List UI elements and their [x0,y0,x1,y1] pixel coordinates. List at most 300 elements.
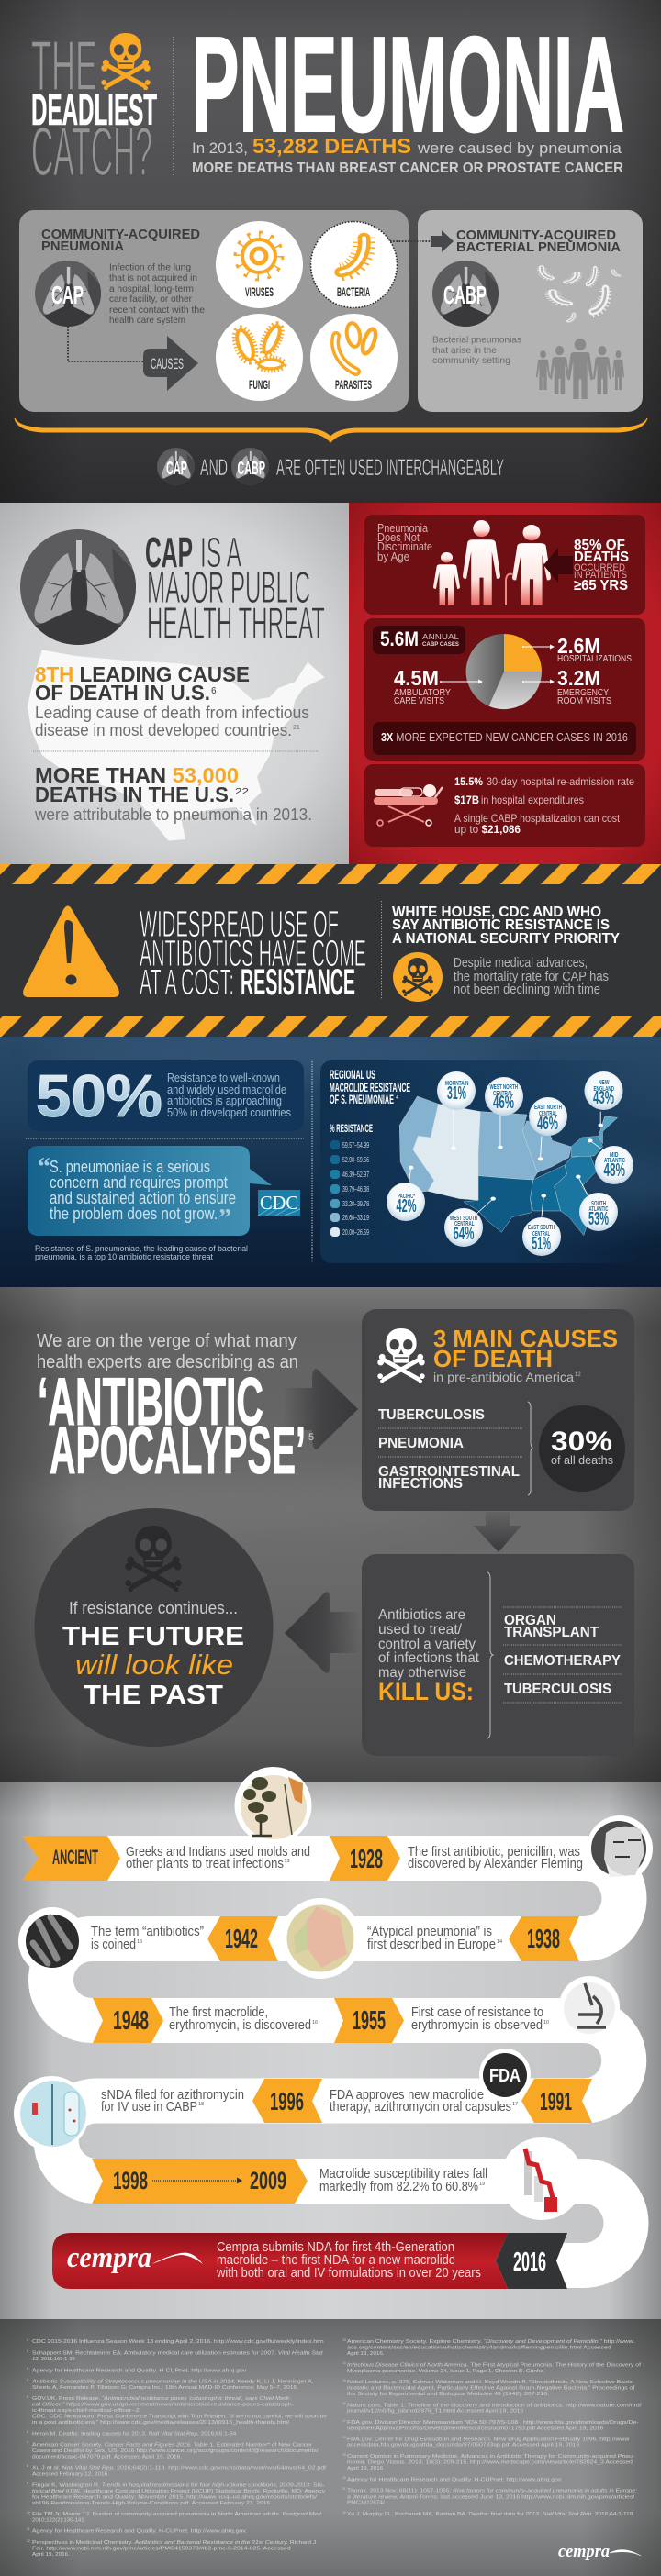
timeline: 1991: FDA approves new macrolide [330,2088,484,2103]
text: CAP definition: a hospital, long-term [109,283,194,294]
bubble: mid atlantic 48% [595,1146,633,1184]
text: mortality not declining [454,956,609,997]
timeline: 1998 to 2009 [92,2137,583,2220]
panel: annual CABP cases [364,618,645,761]
text: top 10 threat: Resistance of S. pneumoniae, the leading cause of bacterial [35,1244,248,1254]
panel: 50 percent resistance: 50% in developed countries [167,1105,291,1119]
stat: more than 53,000 deaths: were attributable to pneumonia in 2013. [34,805,312,824]
text: references left column: CDC 2015-2016 Influenza Season Week 13 ending April 2, 2016. http://www.cdc.gov/flu/weekly/index.htm [32,2339,324,2345]
panel: kill us: KILL US: [378,1678,474,1705]
stat: 3.2M emergency room visits: 3.2M [557,666,600,690]
legend: percent resistance: % RESISTANCE [330,1122,373,1135]
timeline: 1991: 1991 [540,2087,572,2115]
text: references left column: Accessed February 12, 2016. [32,2471,109,2477]
text: deaths statistic: In 2013, [192,139,248,157]
text: references left column [27,2338,328,2558]
section: antibiotic apocalypse background [0,1287,661,1782]
text: references right column: FDA.gov. Center for Drug Evaluation and Research. New Drug Application February 1996. http://www [347,2437,630,2442]
text: references left column: 12 [27,2539,30,2543]
arrow: towards elder [543,548,573,583]
legend: percent resistance: 46.39–52.97 [342,1170,369,1179]
panel: does not discriminate by age: Pneumonia [377,521,429,535]
text: references left column: for Healthcare Research and Quality; November 2015. http://www.hcup-us.ahrq.gov/reports/statbriefs/ [32,2494,317,2500]
text: references left column: Sheets A, Fernandes P, Tillotson G; Cempra Inc.; 19th Annual MAD-ID Conference; May 5–7, 2016. [32,2385,298,2391]
callout: Cempra 2016 NDA: Cempra submits NDA for first 4th-Generation [217,2240,454,2255]
arrow: causes [143,336,198,391]
icon: white skull [378,1328,424,1383]
text: references left column: 3 [27,2367,28,2371]
title: the deadliest catch: THE [31,27,97,105]
bubble: west south central 64%: 64% [454,1224,475,1244]
timeline: 1955: First case of resistance to [411,2005,543,2020]
bubble: east north central 46%: 46% [537,1114,558,1134]
bubble: west north central 46%: WEST NORTH [490,1084,518,1091]
text: references left column: File TM Jr, Marrie TJ. Burden of community-acquired pneumonia in North American adults. Postgrad Med. [32,2512,323,2517]
image: falling bar chart [500,2137,583,2220]
stat: 85% of deaths [574,538,629,594]
image: IV bags [14,2076,89,2151]
panel: kill us: of infections that [378,1650,480,1666]
title: the deadliest catch: DEADLIEST [31,86,157,135]
text: references right column: PMC3812874/ [347,2501,385,2506]
callout: CDC quote [28,1146,272,1236]
stat: 2.6M hospitalizations: 2.6M [557,634,600,658]
callout: Cempra 2016 NDA: 2016 [513,2248,546,2277]
heading: widespread use of antibiotics [140,903,366,1003]
bubble: south atlantic 53% [579,1193,618,1231]
logo: cempra [67,2240,203,2273]
bubble: south atlantic 53%: 53% [588,1209,609,1229]
callout: CDC quote: and sustained action to ensure [50,1189,236,1207]
text: references right column: the Society for Experimental and Biological Medicine 49 (1942): 207-210. [347,2392,549,2397]
bubble: west north central 46%: CENTRAL [493,1091,513,1097]
text: references left column: 13. 2011;169:1-38 [32,2357,75,2362]
section: references background [0,2319,661,2576]
icon: viruses: VIRUSES [245,284,274,299]
icon: skull badge [393,952,443,1002]
bubble: south atlantic 53%: SOUTH [591,1201,606,1207]
timeline: 1991 [330,2049,592,2123]
text: CAP and CABP interchangeable [157,448,504,485]
text: cost statistics: 30-day hospital re-admission rate [487,775,634,788]
text: references left column: 8 [27,2464,28,2468]
text: CABP definition: that arise in the [432,345,497,356]
panel: 3 main causes of death: INFECTIONS [378,1476,463,1492]
timeline: 1948 [93,1998,318,2043]
bubble: west north central 46%: 46% [493,1093,514,1113]
text: references left column: tistical Brief #196. Healthcare Cost and Utilization Project (HCUP) Statistical Briefs. Rockville, MD: Agency [32,2489,325,2494]
stat: 3.2M emergency room visits: ROOM VISITS [557,695,611,706]
text: cost statistics [454,775,634,836]
text: references left column: Agency for Healthcare Research and Quality. H-CUPnet. http://www.ahrq.gov. [32,2529,247,2535]
timeline: 1998 to 2009: 2009 [250,2167,286,2194]
text: CAP definition: that is not acquired in [109,272,197,283]
stat: 8th leading cause: OF DEATH IN U.S. [35,681,210,705]
section: CAP public health threat, left panel: HEALTH THREAT [147,599,325,649]
heading: CAP is a major public health threat [145,528,325,649]
callout: CDC quote: “ [38,1153,50,1182]
icon: bacteria group [542,267,620,321]
text: deaths statistic: were caused by pneumonia [417,139,622,157]
text: cost statistics: 15.5% [454,775,483,788]
icon: parasites [310,314,398,401]
arrow: bacteria to CABP [390,230,454,252]
text: cost statistics: in hospital expenditures [481,794,584,806]
text: CAP definition: recent contact with the [109,305,205,316]
icon: CDC logo: CDC [260,1192,298,1214]
text: top 10 threat: pneumonia, is a top 10 antibiotic resistance threat [35,1252,213,1262]
timeline: 1942: is coined [91,1938,136,1952]
text: CABP definition: community setting [432,355,510,366]
stat: more than 53,000 deaths: 22 [235,787,250,797]
bubble: mountain 31% [437,1071,476,1110]
bubble: new england 43%: 43% [593,1088,614,1108]
text: verge of apocalypse: ‘ANTIBIOTIC [38,1365,263,1439]
section: macrolide resistance background [0,1037,661,1287]
text: deaths statistic: 53,282 DEATHS [252,134,411,158]
text: references right column: April 19, 2016. [347,2351,385,2357]
text: references left column: in a post antibiotic era.” http://www.cdc.gov/media/releases/2013/t0916_health-threats.html [32,2420,289,2426]
text: national security priority [392,905,620,947]
panel: 50 percent resistance: antibiotics is approaching [167,1094,282,1107]
bubble: mid atlantic 48%: 48% [604,1160,625,1181]
text: references right column: 19 [342,2453,346,2457]
stat: 85% of deaths: IN PATIENTS [574,570,627,581]
heading: CAP is a major public health threat: CAP [145,528,193,576]
arrow: left towards future [285,1592,361,1673]
timeline: 1938 [280,1898,579,1979]
text: references left column: Agency for Healthcare Research and Quality. H-CUPnet. http://www.ahrq.gov [32,2368,246,2373]
icon: lungs [20,529,136,645]
panel: 3 main causes of death: 3 MAIN CAUSES [433,1325,618,1352]
icon: hospital bed [374,784,443,826]
text: references right column: 17 [342,2419,346,2423]
panel: community-acquired bacterial pneumonia [418,210,643,412]
stat: 8th leading cause: 21 [293,725,300,731]
text: CAP definition: care facility, or other [109,294,192,305]
timeline: 1928: 1928 [350,1845,383,1874]
text: mortality not declining: Despite medical advances, [454,956,588,971]
text: references left column: 7 [27,2441,28,2445]
text: references left column: American Cancer Society. Cancer Facts and Figures 2016. Table 1. Estimated Number* of New Cancer [32,2442,312,2448]
timeline: 1955: 10 [543,2020,549,2026]
section: red statistics background [349,503,661,864]
text: references left column: 2010;122(2):130-141. [32,2518,86,2524]
image: herbs [235,1767,312,1844]
text: CABP definition: Bacterial pneumonias [432,334,521,345]
icon: FDA: FDA [489,2066,521,2086]
callout: Cempra 2016 NDA: macrolide – the first NDA for a new macrolide [217,2253,455,2268]
text: mortality not declining: the mortality rate for CAP has [454,970,609,984]
panel: community-acquired pneumonia [19,210,409,412]
text: CAP definition: health care system [109,315,185,326]
legend: percent resistance: 26.60–33.19 [342,1213,369,1222]
icon: CAP lung circle [35,261,101,327]
timeline: 1955 [334,1976,620,2043]
text: references left column: CDC. CDC Newsroom. Press Conference Transcript with Tom Frieden. “If we’re not careful, we will soon be [32,2415,328,2420]
panel: kill us: TRANSPLANT [504,1625,599,1640]
callout: the future will look like the past: THE FUTURE [62,1622,244,1651]
text: references left column: document/acspc-047079.pdf. Accessed April 19, 2016. [32,2455,183,2460]
map: US regions [399,1096,618,1236]
text: references left column: 6 [27,2430,28,2434]
panel: community-acquired pneumonia: COMMUNITY-ACQUIRED [41,227,200,242]
text: verge of apocalypse: APOCALYPSE’ [50,1414,306,1488]
panel: kill us: ORGAN [504,1613,556,1628]
icon: bacteria: BACTERIA [337,284,370,299]
chart: pie of care settings [466,634,542,709]
bubble: east south central 51%: CENTRAL [532,1231,550,1238]
legend: percent resistance: 59.57–54.99 [342,1140,369,1149]
bubble: east south central 51%: EAST SOUTH [528,1225,555,1231]
text: references right column: American Chemistry Society. Explore Chemistry. “Discovery and Development of Penicillin.” http://www. [347,2339,635,2345]
timeline: 1948: 16 [312,2020,318,2026]
legend: percent resistance [330,1122,373,1237]
icon: CABP lung circle: CABP [443,281,487,309]
text: references left column: GOV.UK. Press Release. “Antimicrobial resistance poses ‘catastrophic threat’, says Chief Medi- [32,2396,291,2402]
text: references left column: Xu J et al. Natl Vital Stat Rep. 2016;64(2):1-119. http://www.cdc.gov/nchs/data/nvsr/nvsr64/nvsr64_02.pdf [32,2466,326,2471]
stat: 3.2M emergency room visits: EMERGENCY [557,687,609,698]
arrow: right towards causes [283,1369,358,1449]
timeline: 1942: 1942 [225,1925,258,1954]
panel: community-acquired bacterial pneumonia: BACTERIAL PNEUMONIA [456,239,621,255]
callout: CDC quote: concern and requires prompt [50,1173,228,1192]
callout: Cempra 2016 NDA [52,2233,567,2289]
image: map of Europe [280,1898,361,1979]
icon: dark skull [126,1526,181,1592]
panel: kill us [362,1554,634,1756]
legend: percent resistance: 20.00–26.59 [342,1227,369,1237]
text: CAP definition [109,262,205,326]
text: references right column: velopmentApprovalProcess/DevelopmentResources/ucm071753.pdf Accessed April 19, 2016 [347,2426,604,2431]
legend: percent resistance: 39.79–46.38 [342,1184,369,1194]
text: references left column: sb196-Readmissions-Trends-High-Volume-Conditions.pdf. Accessed February 23, 2016. [32,2501,272,2506]
callout: the future will look like the past [35,1508,274,1747]
timeline: ancient: other plants to treat infections [126,1857,284,1871]
map: US outline [28,650,325,841]
bubble: pacific 42%: PACIFIC* [398,1194,415,1200]
timeline: 1996: sNDA filed for azithromycin [101,2088,244,2103]
heading: widespread use of antibiotics: AT A COST: [140,962,234,1003]
text: cost statistics: up to $21,086 [454,823,521,836]
timeline: 1996: 1996 [270,2087,304,2115]
timeline: ancient: 13 [285,1859,290,1864]
timeline: 1938: first described in Europe [367,1938,496,1952]
icon: fungi [216,314,303,401]
timeline: 1942: The term “antibiotics” [91,1925,204,1939]
panel: 3 main causes of death: TUBERCULOSIS [378,1407,485,1423]
icon: CABP lung circle [432,261,499,327]
timeline: 1942 [18,1907,278,1975]
heading: regional title [330,1067,410,1106]
timeline: 1955: 1955 [353,2006,386,2036]
legend: percent resistance: 52.98–59.56 [342,1155,369,1164]
text: deaths statistic [192,134,623,176]
text: references right column: 13 [342,2338,346,2342]
text: CAP and CABP interchangeable: AND [200,455,228,481]
stat: 2.6M hospitalizations [557,634,632,664]
callout: CDC quote: S. pneumoniae is a serious [50,1158,210,1176]
text: references right column: April 19, 2016 [347,2466,384,2471]
panel: 3 main causes of death: in pre-antibiotic America [433,1370,574,1384]
bubble: pacific 42% [387,1183,425,1221]
panel: does not discriminate by age [364,515,645,615]
stat: 8th leading cause [35,662,309,739]
text: references right column: 20 [342,2476,346,2480]
icon: parasites: PARASITES [335,377,372,392]
icon: FDA [479,2049,531,2100]
bubble: mid atlantic 48%: ATLANTIC [604,1158,625,1164]
callout: the future will look like the past: THE PAST [84,1681,223,1710]
stat: more than 53,000 deaths: DEATHS IN THE U.S. [35,783,234,806]
panel: regional macrolide resistance map [320,1060,644,1263]
stat: 5.6M annual cases: CABP CASES [422,641,460,648]
panel: 50 percent resistance: Resistance to well-known [167,1071,280,1084]
heading: widespread use of antibiotics: WIDESPREAD USE OF [140,903,339,945]
stat: 4.5M ambulatory care visits [394,666,451,706]
timeline: 1948: The first macrolide, [169,2005,268,2020]
bubble: east north central 46%: CENTRAL [539,1111,557,1117]
timeline: 1948: erythromycin, is discovered [169,2018,311,2033]
text: references left column: Perspectives in Medicinal Chemistry. Antibiotics and Bacterial Resistance in the 21st Century. Richard J [32,2540,316,2546]
callout: the future will look like the past: If resistance continues... [69,1599,238,1617]
text: references right column: 18 [342,2436,346,2439]
text: references left column: Fair. http://www.ncbi.nlm.nih.gov/pmc/articles/PMC4159373/#b2-pmc-6-2014-025. Accessed [32,2547,291,2552]
stat: more than 53,000 deaths: MORE THAN 53,000 [35,763,239,787]
text: references right column: 22 [342,2511,346,2515]
timeline: 1998 to 2009: Macrolide susceptibility rates fall [319,2167,487,2182]
stat: 3.2M emergency room visits [557,666,611,706]
stat: 85% of deaths: ≥65 YRS [574,578,628,594]
image: microscope [559,1976,620,2037]
icon: skull and crossbones [102,33,150,90]
section: CAP public health threat, left panel [0,503,349,864]
text: references right column: 15 [342,2379,346,2382]
timeline: ancient [22,1767,312,1881]
icon: warning triangle [24,906,118,996]
stat: 4.5M ambulatory care visits: CARE VISITS [394,695,444,706]
arrow: down to kill us [474,1512,521,1552]
text: references right column: 21 [342,2487,346,2491]
text: verge of apocalypse: health experts are describing as an [37,1352,298,1372]
text: references right column: acs.org/content/acs/en/education/whatischemistry/landmarks/flemingpenicillin.html Accessed [347,2346,611,2351]
text: top 10 threat [35,1244,248,1262]
panel: 3 main causes of death: 12 [575,1372,581,1378]
panel: 3 main causes of death: GASTROINTESTINAL [378,1464,520,1480]
text: CABP definition [432,334,521,366]
text: references right column: 14 [342,2361,346,2365]
text: references left column: Antibiotic Susceptibility of Streptococcus pneumoniae in the USA in 2014; Keedy K, Li J, Nenninger A, [31,2379,314,2384]
stat: 30% of all deaths [539,1405,625,1492]
timeline: 1938: 14 [497,1939,502,1945]
panel: 50 percent resistance: 50% [36,1062,162,1129]
timeline: 1998 to 2009: 19 [479,2182,485,2187]
text: references left column: Schappert SM, Rechtsteiner EA. Ambulatory medical care utilization estimates for 2007. Vital Health Stat [32,2350,323,2356]
text: references left column: 11 [27,2527,30,2531]
bubble: new england 43% [584,1071,622,1110]
panel: community-acquired bacterial pneumonia: COMMUNITY-ACQUIRED [456,228,616,243]
text: references left column: cal Officer.” https://www.gov.uk/government/news/antimicrobial-resistance-poses-catastroph- [32,2403,294,2408]
heading: widespread use of antibiotics: RESISTANCE [241,962,355,1003]
section: resistance warning band [0,864,661,1037]
timeline: 1938: “Atypical pneumonia” is [367,1925,492,1939]
text: references right column: Mycoplasma pneumoniae. Volume 24, Issue 1, Page 1. Cheston B. Cunha. [347,2369,545,2374]
stat: more than 53,000 deaths [34,763,312,824]
bubble: south atlantic 53%: ATLANTIC [589,1206,608,1213]
text: references right column: journal/v12/n5/fig_tab/nrd3975_T1.html Accessed April 19, 2016 [346,2409,524,2415]
timeline: 1996 [14,2076,322,2151]
bubble: east north central 46% [529,1097,567,1136]
icon: CAP lung circle: CAP [51,281,84,309]
text: references left column: ic-threat-says-chief-medical-officer--2 [32,2408,140,2414]
text: CATCH? [31,113,152,190]
text: references right column: a literature review; Antoni Torres; last accessed June 13, 2016 http://www.ncbi.nlm.nih.gov/pmc/articles/ [347,2494,635,2500]
panel: regional macrolide resistance map: MACROLIDE RESISTANCE [330,1080,410,1094]
panel: 50 percent resistance [28,1060,304,1131]
panel: 3 main causes of death [362,1309,634,1511]
bubble: mid atlantic 48%: MID [610,1152,619,1159]
text: references left column: Heron M. Deaths: leading causes for 2013. Natl Vital Stat Rep. 2016;65:1-94 [32,2431,237,2437]
panel: hospital costs [364,764,645,847]
timeline: ancient: Greeks and Indians used molds and [126,1845,310,1860]
timeline: 1942: 15 [137,1939,142,1945]
legend: percent resistance: 33.20–39.78 [342,1199,369,1208]
text: references right column: 16 [342,2402,346,2405]
text: references left column: Cases and Deaths by Sex, US, 2016 http://www.cancer.org/acs/groups/content/@research/documents/ [32,2448,319,2454]
heading: regional title: REGIONAL US [330,1067,375,1082]
text: references right column: accessdata.fda.gov/drugsatfda_docs/nda/97/050733ap.pdf Accessed April 19, 2016 [347,2443,580,2448]
text: references left column: April 19, 2016. [32,2552,70,2558]
bubble: new england 43%: NEW [599,1080,610,1086]
text: references left column: Fingar K, Washington R. Trends in hospital readmissions for four high-volume conditions, 2009-2013: Sta- [32,2482,324,2488]
panel: 50 percent resistance: and widely used macrolide [167,1083,286,1096]
text: references left column: 5 [27,2395,28,2399]
stat: 8th leading cause: Leading cause of death from infectious [35,704,309,722]
title: the deadliest catch [31,27,157,190]
panel: does not discriminate by age: Does Not [377,530,420,544]
stat: 85% of deaths: DEATHS [574,550,629,565]
text: references left column: 2 [27,2349,28,2353]
bubble: west south central 64%: CENTRAL [454,1221,475,1227]
icon: viruses [216,221,303,308]
logo: cempra footer: cempra [558,2542,610,2561]
text: verge of apocalypse [37,1331,314,1488]
icon: child, adult, elder [433,520,551,605]
panel: kill us: CHEMOTHERAPY [504,1653,621,1669]
icon: people crowd [536,339,624,399]
bubble: east south central 51% [522,1217,561,1256]
icon: fungi: FUNGI [249,377,270,392]
panel: 3 main causes of death: PNEUMONIA [378,1436,464,1451]
heading: regional title: OF S. PNEUMONIAE [330,1092,394,1106]
bubble: west south central 64% [444,1208,483,1247]
stat: 5.6M annual cases: ANNUAL [422,633,460,641]
timeline: 1996: 18 [198,2102,204,2107]
text: references right column: Thorax. 2013 Nov; 68(11): 1057-1065; Risk factors for community-acquired pneumonia in adults in Europe: [347,2489,637,2494]
panel: kill us: TUBERCULOSIS [504,1682,611,1697]
text: references right column [342,2338,642,2517]
bubble: west north central 46% [485,1077,523,1116]
stat: 85% of deaths: 85% OF [574,538,625,553]
callout: the future will look like the past: will look like [75,1649,233,1681]
text: CAP and CABP interchangeable: CABP [237,459,265,479]
text: CAP definition: Infection of the lung [109,262,191,273]
stat: 5.6M annual cases: 5.6M [380,627,419,650]
panel: does not discriminate by age: Discriminate [377,539,432,553]
timeline: 1928: discovered by Alexander Fleming [408,1857,583,1871]
callout: CDC quote: ” [218,1205,231,1233]
text: references right column: Agency for Healthcare Research and Quality. H-CUPnet. http://www.ahrq.gov [347,2478,561,2483]
